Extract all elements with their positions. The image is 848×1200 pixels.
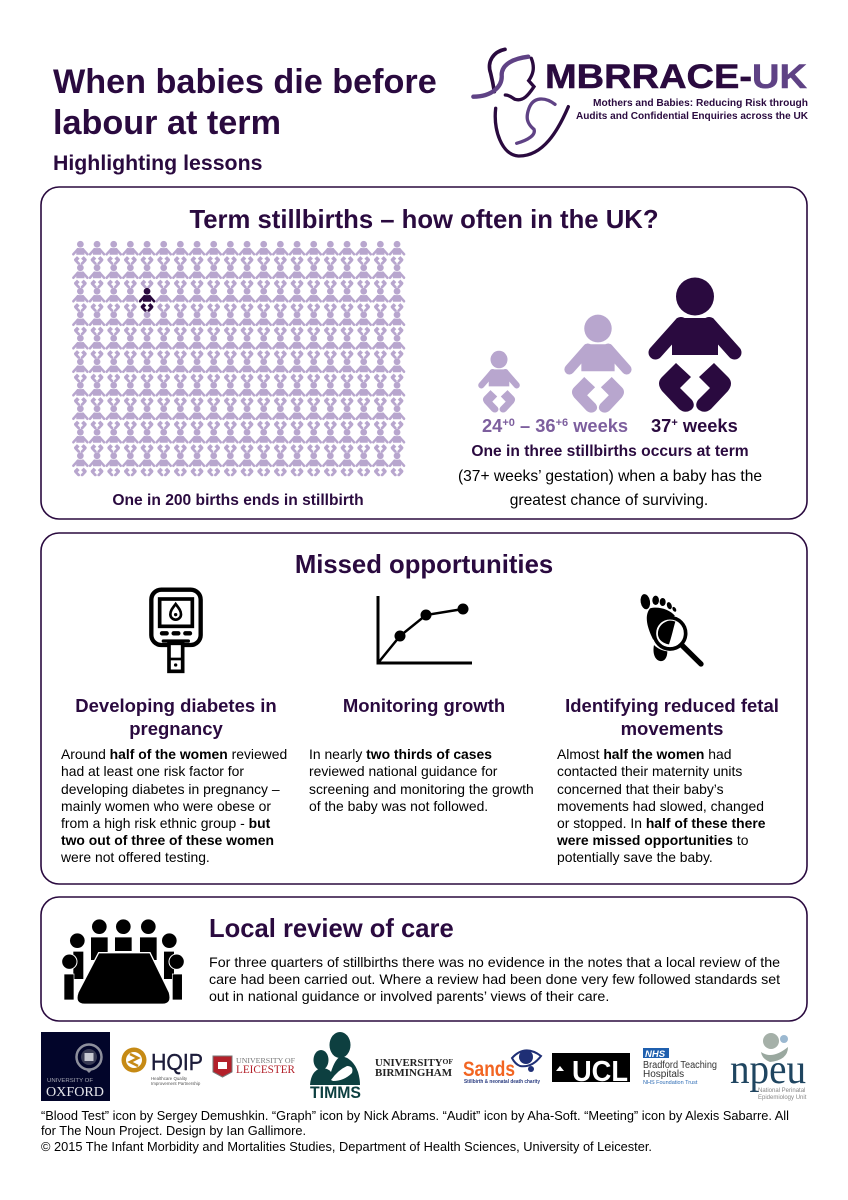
logo: MBRRACE-UK: Mothers and Babies: Reducing Risk through (593, 98, 808, 109)
icon array: 200 babies (73, 241, 404, 476)
logo: University of Birmingham (375, 1058, 453, 1079)
body text: fetal movements: Almost half the women had (557, 746, 731, 762)
heading: term stillbirths: Term stillbirths – how often in the UK? (189, 206, 659, 234)
body text: diabetes: were not offered testing. (60, 849, 210, 865)
body text: local review: care had been carried out. Where a review had been done very few followed standards set (209, 972, 780, 988)
body text: fetal movements: potentially save the baby. (557, 849, 713, 865)
logo: UCL (552, 1053, 630, 1088)
body text: diabetes: developing diabetes in pregnancy – (61, 781, 280, 797)
footer credits: for The Noun Project. Design by Ian Gallimore. (41, 1123, 306, 1138)
logo: University of Leicester: LEICESTER (236, 1064, 295, 1076)
heading: missed opportunities: Missed opportunities (295, 551, 553, 579)
text: one in three: greatest chance of surviving. (510, 492, 708, 509)
logo: HQIP (122, 1048, 203, 1086)
logo: Sands: Stillbirth & neonatal death charity (464, 1079, 540, 1085)
logo: NPEU: National Perinatal (758, 1088, 805, 1094)
body text: diabetes: Around half of the women reviewed (61, 746, 287, 762)
column: fetal movements: Identifying reduced fetal (565, 695, 779, 716)
logo: University of Birmingham: OF (443, 1058, 453, 1066)
logo: Bradford Teaching Hospitals: Hospitals (643, 1069, 684, 1080)
logo: University of Leicester: UNIVERSITY OF (236, 1056, 296, 1065)
logo: University of Oxford: UNIVERSITY OF (47, 1078, 94, 1084)
title: labour at term (53, 104, 281, 142)
label: preterm weeks: – 36 (515, 415, 556, 436)
logo: MBRRACE-UK (473, 49, 809, 156)
body text: fetal movements: concerned that their baby’s (557, 781, 724, 797)
icon: growth graph (378, 596, 472, 663)
text: one in three (458, 443, 762, 509)
logo: Sands (463, 1050, 541, 1085)
logo: Bradford Teaching Hospitals: Bradford Teaching (643, 1060, 717, 1071)
body text: fetal movements (556, 746, 766, 865)
icon: medium baby (569, 315, 627, 413)
icon: blood test meter (151, 590, 201, 671)
icon: large baby (656, 278, 734, 412)
panel: local review of care (41, 897, 807, 1021)
logo: Bradford Teaching Hospitals (643, 1048, 717, 1086)
logo: University of Birmingham: BIRMINGHAM (375, 1068, 453, 1079)
text: one in three: (37+ weeks’ gestation) when a baby has the (458, 468, 762, 485)
column: fetal movements: movements (621, 718, 723, 739)
logo: TIMMS: TIMMS (310, 1083, 361, 1102)
logo: MBRRACE-UK: Audits and Confidential Enquiries across the UK (576, 111, 809, 122)
footer credits: © 2015 The Infant Morbidity and Mortalities Studies, Department of Health Sciences, University of Leicester. (41, 1139, 652, 1154)
logo: Sands: Sands (463, 1057, 515, 1081)
logo: University of Birmingham: UNIVERSITY (375, 1058, 438, 1069)
body text: growth: screening and monitoring the growth (309, 781, 534, 797)
label: preterm weeks: +0 (502, 417, 515, 429)
footer credits: “Blood Test” icon by Sergey Demushkin. “Graph” icon by Nick Abrams. “Audit” icon by Aha-Soft. “Meeting” icon by Alexis Sabarre. All (41, 1108, 789, 1123)
panel: term stillbirths (41, 187, 807, 519)
logo: HQIP: Improvement Partnership (151, 1081, 201, 1086)
body text: diabetes: mainly women who were obese or (61, 798, 271, 814)
caption: one in 200: One in 200 births ends in stillbirth (112, 492, 364, 509)
title (53, 63, 437, 142)
heading: local review: Local review of care (209, 915, 454, 943)
logo: HQIP: Healthcare Quality (151, 1076, 188, 1081)
body text: fetal movements: or stopped. In half of these there (557, 815, 766, 831)
body text: fetal movements: were missed opportunities to (556, 832, 749, 848)
body text: growth: of the baby was not followed. (309, 798, 488, 814)
logo: NPEU (730, 1033, 807, 1101)
logo: University of Oxford (41, 1032, 110, 1101)
body text: growth: In nearly two thirds of cases (309, 746, 492, 762)
logo: Bradford Teaching Hospitals: NHS Foundation Trust (643, 1080, 698, 1086)
label: preterm weeks: weeks (568, 415, 628, 436)
column: growth: Monitoring growth (343, 695, 505, 716)
body text: growth: reviewed national guidance for (309, 763, 498, 779)
icon: foot and magnifier (639, 593, 701, 664)
body text: diabetes (60, 746, 287, 865)
subtitle: Highlighting lessons (53, 151, 262, 175)
logo: NPEU: npeu (730, 1047, 806, 1093)
column: diabetes: Developing diabetes in (75, 695, 277, 716)
body text: diabetes: two out of three of these women (61, 832, 274, 848)
body text: diabetes: from a high risk ethnic group - but (61, 815, 271, 831)
logo: HQIP: HQIP (151, 1049, 203, 1075)
icon: small baby (481, 351, 517, 413)
title: When babies die before (53, 63, 437, 101)
body text: local review (209, 955, 780, 1005)
panel: missed opportunities (41, 533, 807, 884)
logo: MBRRACE-UK: MBRRACE- UK (545, 58, 807, 96)
icon: meeting table (62, 919, 184, 1004)
column: diabetes: pregnancy (129, 718, 223, 739)
footer credits (41, 1108, 789, 1154)
body text: local review: For three quarters of stillbirths there was no evidence in the notes that a local review of the (209, 955, 780, 971)
logo: University of Oxford: OXFORD (46, 1084, 104, 1099)
column: fetal movements (556, 695, 779, 865)
label: term weeks: weeks (678, 415, 738, 436)
label: preterm weeks: 24 (482, 415, 502, 436)
logo: Bradford Teaching Hospitals: NHS (645, 1049, 666, 1060)
label: term weeks: 37 (651, 415, 671, 436)
body text: growth (309, 746, 534, 814)
logo: UCL: UCL (572, 1056, 628, 1088)
logo: University of Leicester (213, 1056, 296, 1077)
body text: diabetes: had at least one risk factor for (61, 763, 244, 779)
body text: fetal movements: contacted their maternity units (557, 763, 742, 779)
label: preterm weeks: +6 (556, 417, 568, 429)
logo: TIMMS (310, 1032, 361, 1102)
body text: local review: out in national guidance or involved parents’ views of their care. (209, 989, 609, 1005)
logo: NPEU: Epidemiology Unit (758, 1095, 807, 1101)
column: diabetes (60, 695, 287, 865)
body text: fetal movements: movements had slowed, changed (557, 798, 764, 814)
text: one in three: One in three stillbirths occurs at term (471, 443, 749, 460)
label: term weeks: + (671, 417, 678, 429)
column: growth (309, 695, 534, 814)
